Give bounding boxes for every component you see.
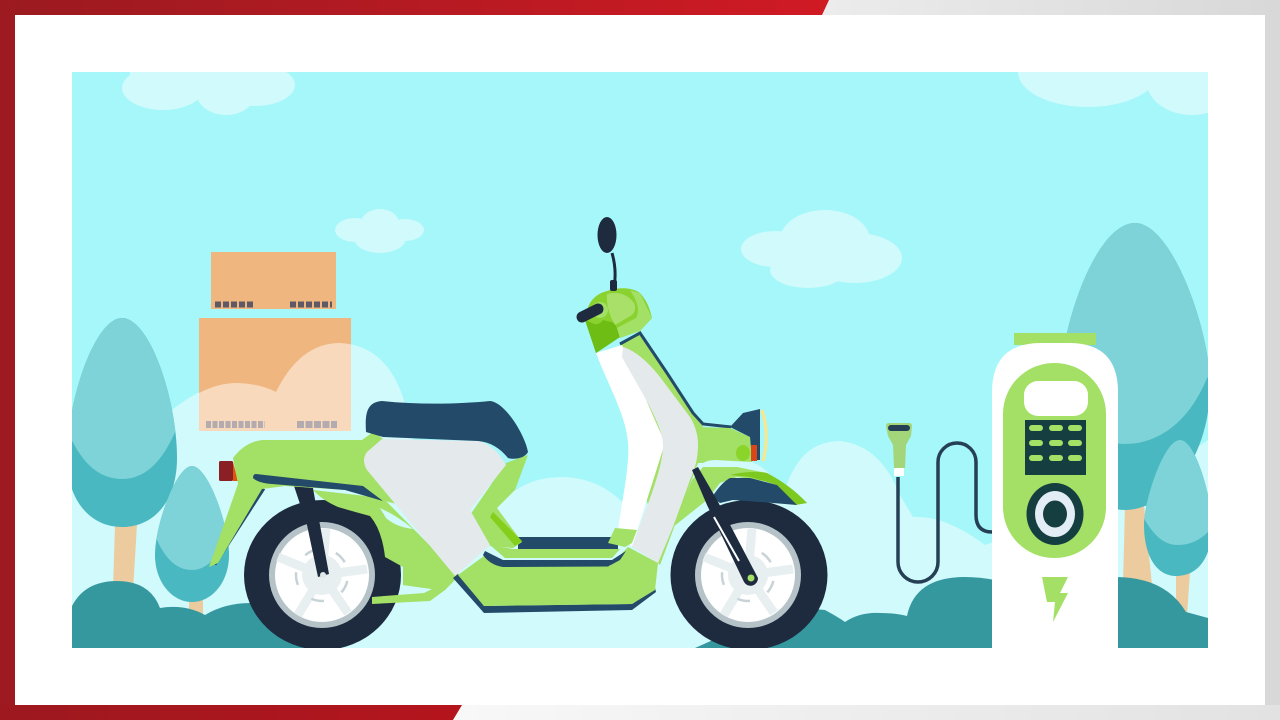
mirror — [598, 217, 617, 291]
footplate — [608, 528, 637, 547]
scene background — [60, 37, 1238, 650]
body gap — [380, 508, 413, 529]
front panel — [698, 427, 752, 463]
rear body — [209, 432, 400, 567]
rear wheel — [244, 500, 401, 650]
sky — [72, 72, 1208, 545]
front fender — [673, 467, 807, 527]
screen — [1024, 381, 1088, 416]
rear fender — [313, 490, 458, 590]
cargo boxes — [199, 252, 351, 431]
green control panel — [1003, 363, 1106, 558]
box: lower — [199, 318, 351, 431]
bushes — [72, 577, 1208, 648]
top bar — [1014, 333, 1096, 345]
station body — [992, 343, 1118, 648]
floor panel — [458, 547, 658, 606]
rear suspension — [294, 486, 329, 578]
shield green backing — [620, 332, 703, 565]
gray shield — [622, 347, 698, 563]
front wheel — [670, 500, 828, 650]
charging station — [992, 333, 1118, 648]
charging plug — [886, 423, 912, 476]
floor underside — [453, 574, 656, 613]
box: upper — [211, 252, 336, 309]
seat — [366, 401, 528, 459]
footrest bar — [372, 579, 456, 604]
floor stripes — [483, 545, 626, 567]
tail light — [219, 461, 238, 481]
support highlight — [490, 512, 522, 546]
shield outline — [620, 333, 731, 427]
right trees — [1066, 223, 1208, 612]
charging cable — [898, 443, 992, 582]
keypad — [1025, 420, 1086, 475]
grip — [582, 302, 608, 318]
socket — [1026, 483, 1084, 545]
clouds — [122, 72, 1208, 288]
headlight — [730, 409, 766, 461]
handlebar head — [585, 288, 652, 353]
front fork — [692, 467, 758, 586]
pale hills — [72, 343, 1208, 648]
rear strut — [214, 488, 263, 564]
icon: lightning bolt — [1042, 577, 1068, 622]
scooter — [209, 217, 828, 650]
body stripe — [253, 474, 383, 501]
white shield — [596, 345, 665, 547]
floor top band — [518, 537, 618, 550]
gray side panel — [364, 439, 506, 576]
seat support — [470, 455, 528, 548]
left trees — [72, 318, 229, 614]
